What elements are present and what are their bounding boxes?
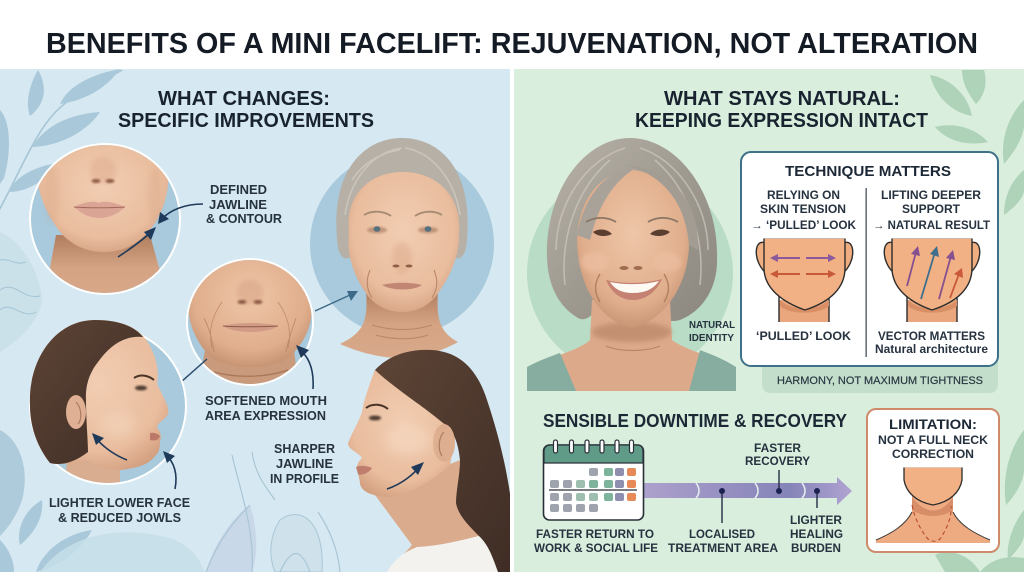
panel: technique matters xyxy=(741,152,998,366)
label: faster recovery: RECOVERY xyxy=(745,456,810,468)
label: sharper jawline: IN PROFILE xyxy=(270,472,339,486)
panel: what stays natural xyxy=(514,69,1024,572)
text: relying on skin tension xyxy=(751,190,857,232)
label: sharper jawline xyxy=(270,442,339,486)
label: faster recovery xyxy=(745,443,810,468)
heading: limitation: CORRECTION xyxy=(892,449,974,461)
label: lighter healing burden: HEALING xyxy=(790,529,843,541)
label: localised treatment area: LOCALISED xyxy=(689,529,755,541)
diagram: neck limitation xyxy=(876,466,990,543)
arrow: contour xyxy=(158,204,203,224)
strip: harmony not maximum tightness: HARMONY, NOT MAXIMUM TIGHTNESS xyxy=(777,375,983,387)
photo: softened mouth circle xyxy=(182,258,358,389)
caption: pulled look: ‘PULLED’ LOOK xyxy=(756,331,852,343)
caption: vector matters xyxy=(875,331,988,356)
panel: limitation xyxy=(867,409,999,552)
heading: what changes xyxy=(118,87,374,132)
heading: what stays natural xyxy=(635,87,928,132)
label: natural identity: NATURAL xyxy=(689,320,735,331)
label: natural identity xyxy=(689,320,735,344)
label: sharper jawline: JAWLINE xyxy=(276,457,333,471)
label: faster recovery: FASTER xyxy=(754,443,802,455)
label: lighter healing burden: LIGHTER xyxy=(790,515,843,527)
arrow: reduced jowls xyxy=(163,451,176,489)
label: softened mouth xyxy=(205,394,327,423)
label: faster return: FASTER RETURN TO xyxy=(536,529,654,541)
heading: limitation: NOT A FULL NECK xyxy=(878,435,989,447)
photo: sharper jawline profile xyxy=(348,350,512,572)
label: lighter lower face xyxy=(49,496,190,525)
label: natural identity: IDENTITY xyxy=(689,333,734,344)
icon: calendar xyxy=(544,440,644,520)
label: softened mouth: AREA EXPRESSION xyxy=(205,409,326,423)
text: lifting deeper support xyxy=(873,190,990,232)
timeline arrow xyxy=(644,470,852,523)
text: lifting deeper support: LIFTING DEEPER xyxy=(881,190,982,202)
label: localised treatment area xyxy=(668,529,778,555)
photo: defined jawline circle xyxy=(29,140,203,300)
label: defined jawline xyxy=(206,183,282,226)
heading: limitation xyxy=(878,416,989,461)
label: lighter healing burden: BURDEN xyxy=(791,543,841,555)
label: faster return: WORK & SOCIAL LIFE xyxy=(534,543,658,555)
diagram: vector lift face xyxy=(884,236,980,322)
label: sharper jawline: SHARPER xyxy=(274,442,335,456)
title: BENEFITS OF A MINI FACELIFT: REJUVENATION, NOT ALTERATION xyxy=(46,28,978,60)
text: relying on skin tension: → ‘PULLED’ LOOK xyxy=(751,220,857,232)
strip: harmony not maximum tightness xyxy=(762,350,998,393)
text: relying on skin tension: SKIN TENSION xyxy=(760,204,846,216)
photo: older woman large xyxy=(310,138,494,358)
label: lighter healing burden xyxy=(790,515,843,555)
label: defined jawline: & CONTOUR xyxy=(206,212,282,226)
arrow: lines and softened xyxy=(172,291,358,390)
label: localised treatment area: TREATMENT AREA xyxy=(668,543,778,555)
decorative leaves left xyxy=(0,69,340,572)
text: relying on skin tension: RELYING ON xyxy=(767,190,840,202)
label: softened mouth: SOFTENED MOUTH xyxy=(205,394,327,408)
heading: what changes: WHAT CHANGES: xyxy=(158,87,330,110)
photo: smiling woman natural identity xyxy=(527,138,736,391)
label: lighter lower face: LIGHTER LOWER FACE xyxy=(49,496,190,510)
section: sensible downtime and recovery xyxy=(534,411,852,555)
text: lifting deeper support: SUPPORT xyxy=(902,204,960,216)
caption: vector matters: Natural architecture xyxy=(875,344,988,356)
heading: what stays natural: KEEPING EXPRESSION INTACT xyxy=(635,109,928,132)
label: defined jawline: DEFINED xyxy=(210,183,267,197)
photo: lighter lower face profile circle xyxy=(29,320,187,500)
caption: vector matters: VECTOR MATTERS xyxy=(878,331,985,343)
diagram: pulled face xyxy=(756,236,853,322)
heading: what changes: SPECIFIC IMPROVEMENTS xyxy=(118,109,374,132)
heading: what stays natural: WHAT STAYS NATURAL: xyxy=(664,87,900,110)
title xyxy=(0,0,1024,69)
heading: downtime: SENSIBLE DOWNTIME & RECOVERY xyxy=(543,411,847,431)
label: faster return xyxy=(534,529,658,555)
panel: what changes xyxy=(0,69,512,572)
divider xyxy=(866,188,867,357)
label: defined jawline: JAWLINE xyxy=(209,198,267,212)
heading: technique matters: TECHNIQUE MATTERS xyxy=(785,163,951,180)
heading: limitation: LIMITATION: xyxy=(889,416,977,432)
label: lighter lower face: & REDUCED JOWLS xyxy=(58,511,181,525)
text: lifting deeper support: → NATURAL RESULT xyxy=(873,220,990,232)
decorative leaves right xyxy=(930,70,1024,572)
